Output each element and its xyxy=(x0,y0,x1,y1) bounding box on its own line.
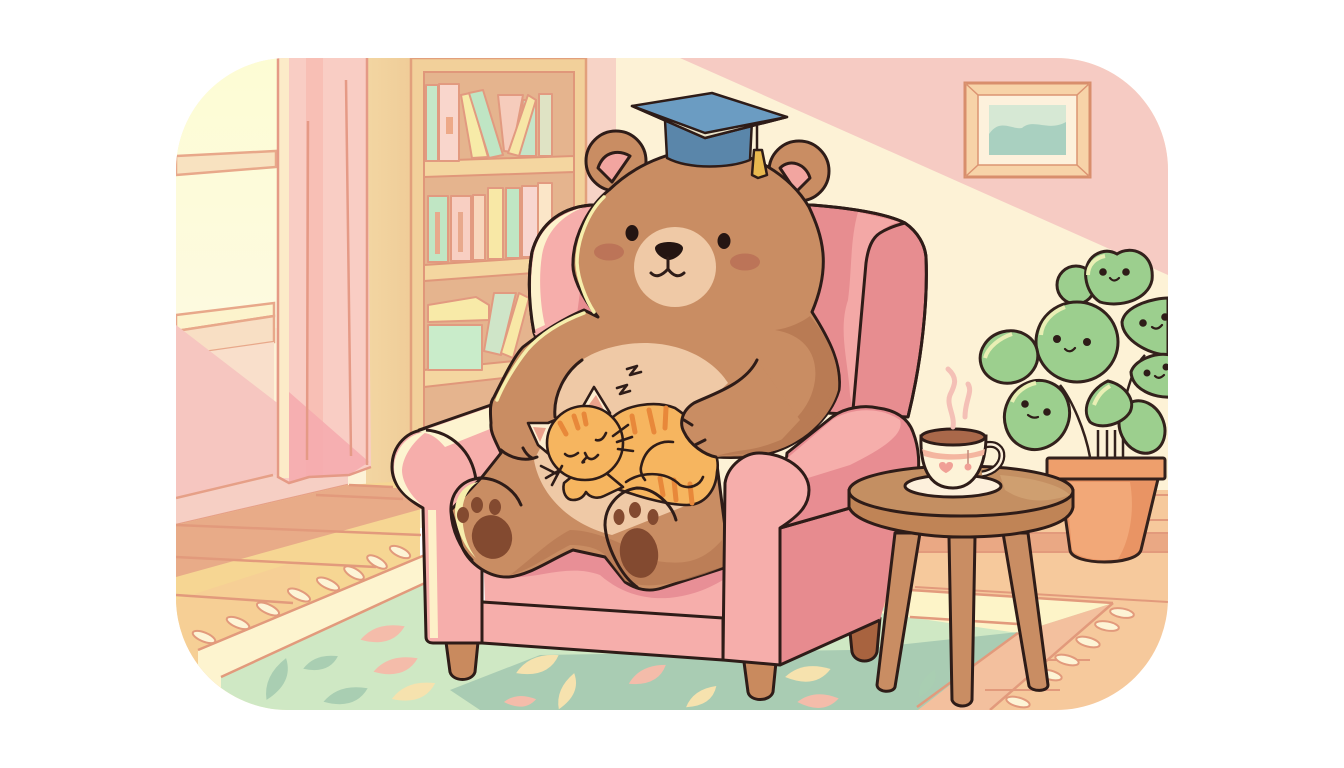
chair legs xyxy=(446,618,880,700)
wall xyxy=(176,58,1168,528)
face xyxy=(594,225,760,276)
window xyxy=(176,58,348,525)
curtain xyxy=(276,58,371,483)
coffee cup and saucer xyxy=(905,429,1002,497)
rug leaves xyxy=(359,622,839,708)
tan wall strip xyxy=(366,58,412,488)
sleep letters xyxy=(617,366,641,394)
sleeping cat xyxy=(528,387,718,505)
armchair back and side xyxy=(392,205,926,700)
left arm underside xyxy=(501,448,537,459)
cat body xyxy=(609,402,720,506)
bear xyxy=(451,131,839,590)
belly xyxy=(534,343,728,535)
bear right hand over cat xyxy=(682,360,832,457)
plant leaves with faces xyxy=(974,250,1173,461)
bookcase xyxy=(411,58,586,478)
rug fringe xyxy=(191,543,1135,709)
plant stems xyxy=(1059,354,1146,456)
room scene xyxy=(176,58,1173,720)
left arm line xyxy=(555,360,582,417)
graduation cap xyxy=(632,93,787,178)
steam xyxy=(948,369,970,427)
body xyxy=(451,150,839,590)
floor xyxy=(176,480,1168,720)
head highlight xyxy=(577,197,604,312)
cat paws xyxy=(563,472,623,500)
cat head xyxy=(547,406,623,480)
chair apron xyxy=(482,602,723,660)
seat xyxy=(484,570,722,616)
right arm side panel xyxy=(782,510,895,663)
leaf highlights xyxy=(985,256,1110,405)
ear right xyxy=(769,141,829,201)
body shading xyxy=(716,316,838,457)
illustration: graduate bear with sleeping cat in armchair xyxy=(176,58,1168,710)
ear left xyxy=(586,131,646,191)
right arm front of chair xyxy=(723,453,809,665)
left arm xyxy=(390,404,500,644)
side table xyxy=(849,466,1073,706)
chair back xyxy=(529,205,926,417)
books xyxy=(426,84,552,370)
right arm top xyxy=(780,407,919,528)
cat ears xyxy=(528,418,560,455)
bear feet xyxy=(451,478,676,587)
rug xyxy=(191,543,1135,720)
muzzle xyxy=(634,227,716,307)
wall picture xyxy=(965,83,1090,177)
plant pot xyxy=(1047,458,1165,562)
